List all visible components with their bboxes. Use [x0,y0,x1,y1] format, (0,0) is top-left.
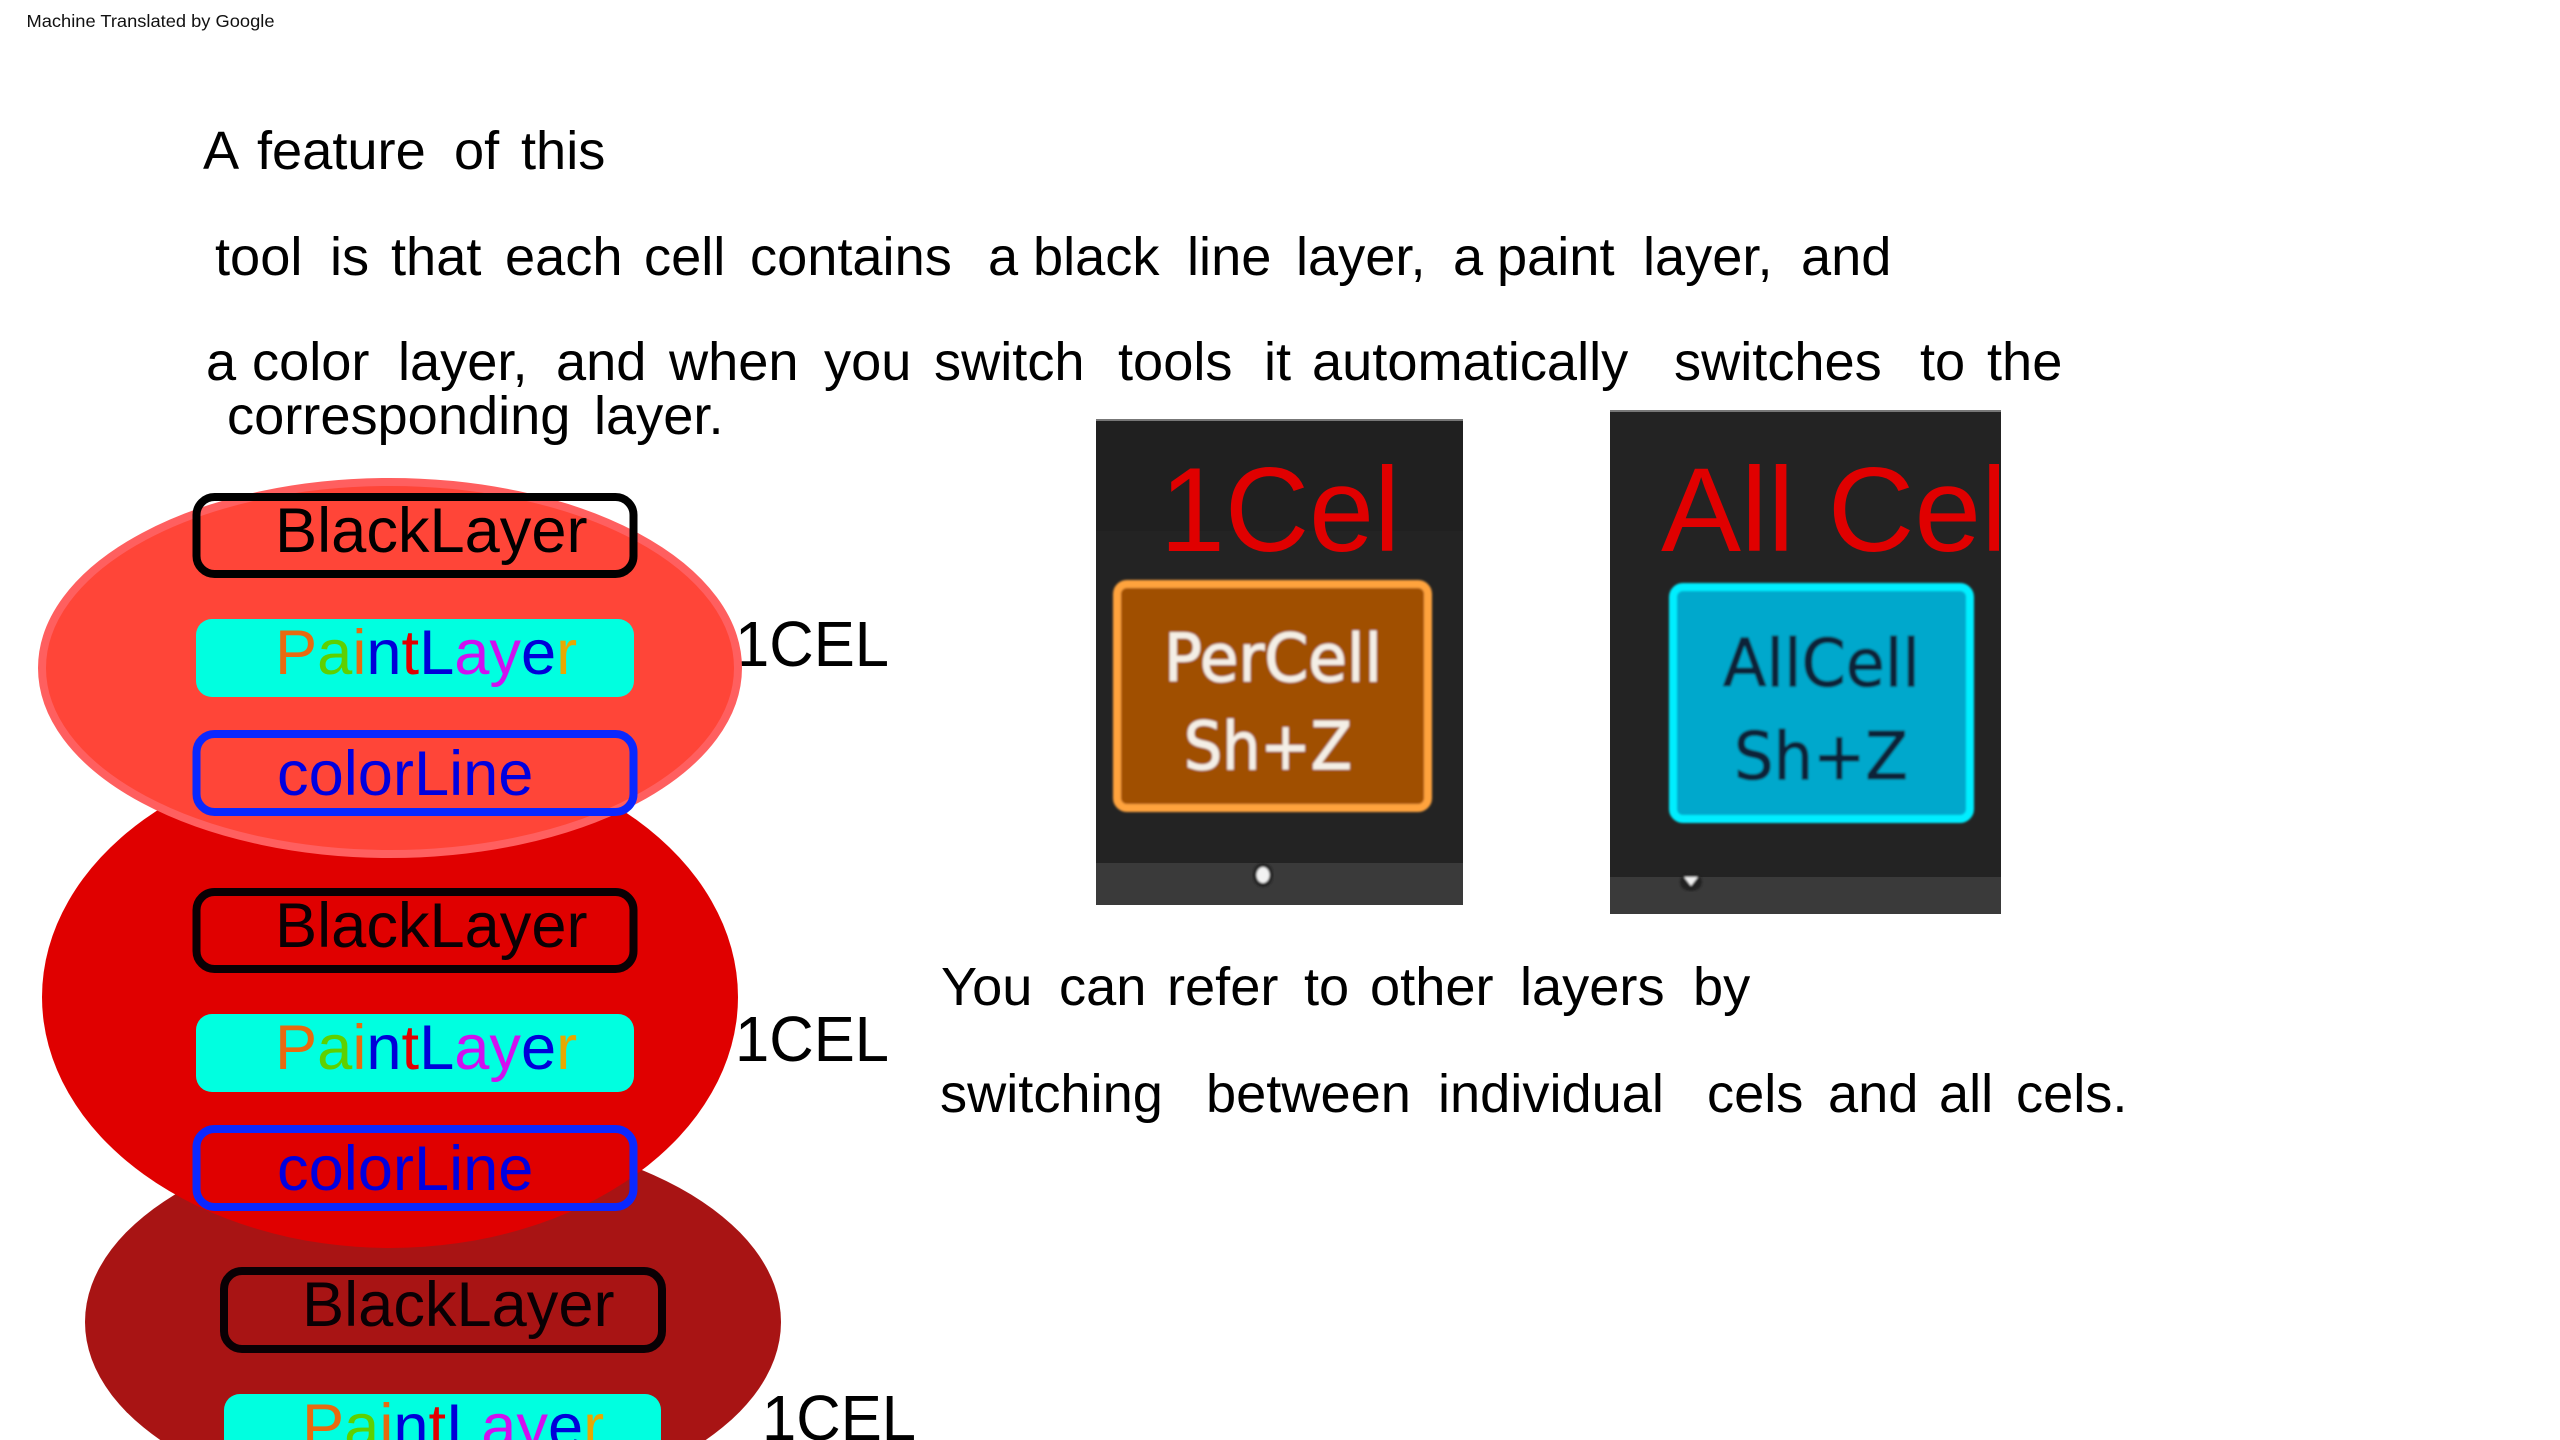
intro text block: switch [934,332,1085,392]
black layer box: BlackLayer [275,496,588,566]
intro text block: cell [644,227,725,287]
intro text block: when [668,332,799,392]
intro text block: corresponding [227,386,570,446]
heading: All Cel: All Cel [1661,443,2008,577]
paint layer box [196,618,634,697]
intro text block: of [454,121,500,181]
black layer box: BlackLayer [275,891,588,961]
closing text block: can [1059,957,1146,1017]
color line box [196,734,634,812]
closing text block: between [1206,1064,1411,1124]
closing text block: cels. [2016,1064,2127,1124]
button: AllCell Sh+Z: AllCell [1723,625,1920,702]
intro text block: switches [1674,332,1882,392]
intro text block: a [988,227,1019,287]
intro text block: tool [215,227,302,287]
button: AllCell Sh+Z: Sh+Z [1734,718,1908,795]
closing text block: other [1370,957,1494,1017]
machine translation credit: Machine Translated by Google [26,11,274,31]
intro text block: paint [1497,227,1615,287]
closing text block: by [1693,957,1750,1017]
panel: all cell button screenshot [1610,410,2008,914]
layer stack: first cel [196,496,634,812]
intro text block: it [1264,332,1291,392]
closing text block: You [941,957,1032,1017]
intro text block: is [330,227,369,287]
intro text block: and [1801,227,1891,287]
closing text block: all [1939,1064,1993,1124]
paint layer box: PaintLayer [275,1013,577,1083]
intro text block: layer, [1643,227,1773,287]
intro text block: layer, [398,332,528,392]
closing text block: refer [1167,957,1278,1017]
intro text block: a [206,332,237,392]
1CEL label, first cel: 1CEL [735,608,889,680]
intro text block: contains [750,227,952,287]
intro text block: that [391,227,481,287]
intro text block: layer. [594,386,724,446]
color line box: colorLine [277,1134,533,1204]
layer stack: third cel [224,1270,662,1440]
intro text block: to [1920,332,1965,392]
paint layer box: PaintLayer [275,618,577,688]
panel: per cell button screenshot [1096,419,1463,905]
intro text block: the [1987,332,2062,392]
paint layer box [224,1392,661,1440]
paint layer box [196,1013,634,1092]
icon: slider marker [1680,873,1702,891]
intro text block: you [824,332,911,392]
closing text block: individual [1438,1064,1664,1124]
button: PerCell Sh+Z: PerCell [1164,620,1382,697]
ellipse: second cel [42,746,738,1248]
intro text block: automatically [1312,332,1628,392]
ellipse: third cel [85,1132,781,1440]
button: AllCell Sh+Z [1673,587,1970,819]
black layer box [196,496,634,574]
closing text block: layers [1520,957,1665,1017]
icon: slider dot [1253,863,1273,887]
button: PerCell Sh+Z [1117,584,1428,808]
intro text block: black [1033,227,1160,287]
closing text block: cels [1707,1064,1803,1124]
intro text block: color [252,332,369,392]
intro text block: line [1187,227,1271,287]
closing text block: switching [940,1064,1163,1124]
intro text block [203,121,2062,446]
color line box [196,1129,634,1207]
black layer box [224,1270,662,1349]
ellipse: first cel [42,482,738,854]
closing text block: to [1304,957,1349,1017]
intro text block: this [521,121,605,181]
closing text block: and [1828,1064,1918,1124]
button: PerCell Sh+Z: Sh+Z [1184,708,1352,785]
closing text block [940,957,2127,1124]
black layer box [196,891,634,969]
intro text block: a [1453,227,1484,287]
heading: 1Cel: 1Cel [1160,443,1400,577]
intro text block: A [203,121,240,181]
intro text block: layer, [1296,227,1426,287]
black layer box: BlackLayer [302,1270,615,1340]
color line box: colorLine [277,739,533,809]
1CEL label, second cel: 1CEL [735,1003,889,1075]
intro text block: feature [257,121,426,181]
intro text block: tools [1118,332,1232,392]
intro text block: each [505,227,623,287]
layer stack: second cel [196,891,634,1207]
intro text block: and [556,332,646,392]
